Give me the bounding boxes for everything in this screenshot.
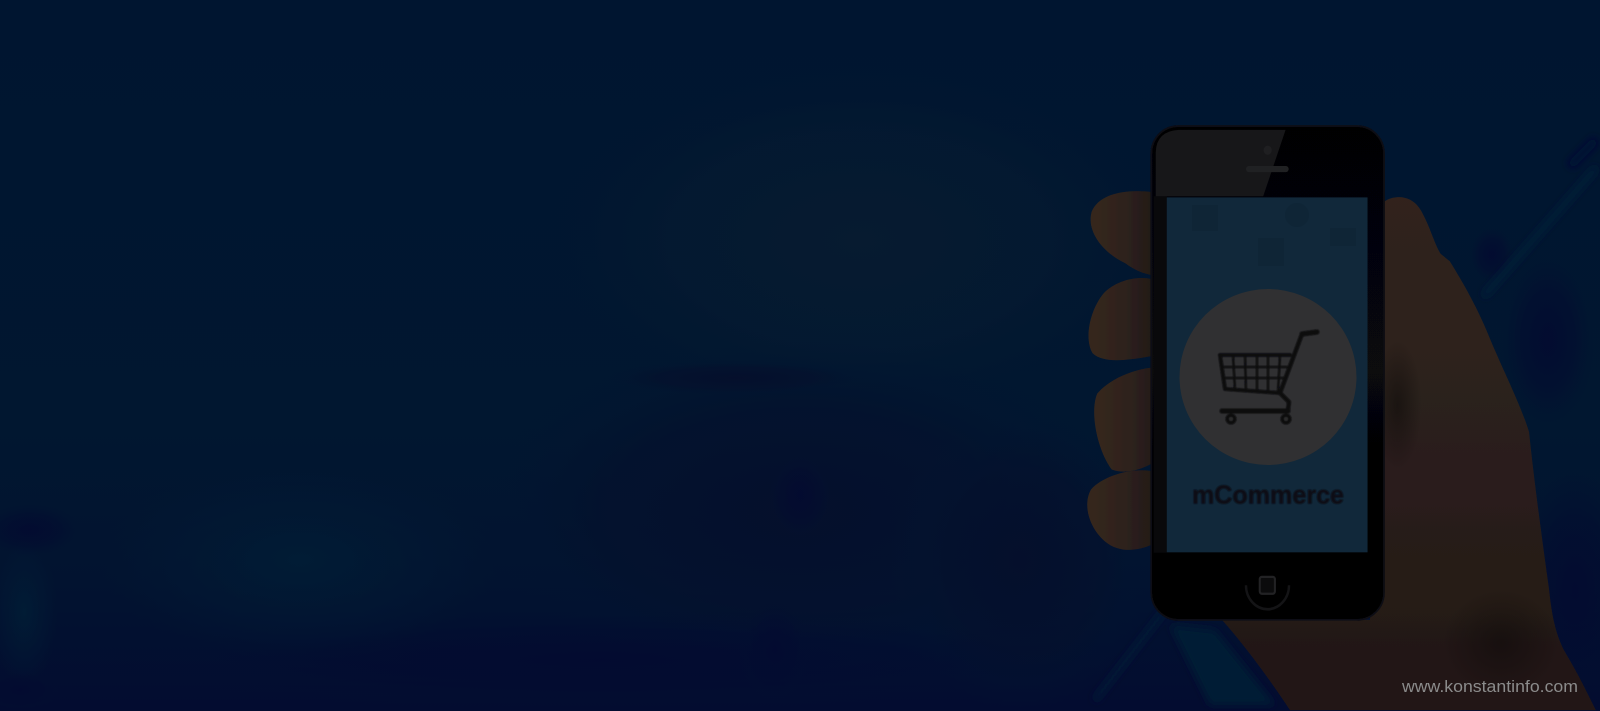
speaker xyxy=(1246,166,1289,172)
grey circle xyxy=(1180,289,1356,465)
finger 2 xyxy=(1089,278,1156,360)
finger 3 xyxy=(1094,368,1163,472)
icon: shopping cart xyxy=(1220,332,1317,423)
home button xyxy=(1246,577,1289,609)
app name: mCommerce xyxy=(1192,480,1344,510)
finger 4 xyxy=(1087,470,1158,550)
hand: inner shading xyxy=(1373,340,1559,696)
top bezel reflection xyxy=(1156,130,1286,196)
phone xyxy=(1151,126,1384,620)
hand: palm and thumb xyxy=(1222,197,1596,710)
hand holding phone xyxy=(1087,191,1596,710)
left side bezel xyxy=(1154,196,1167,553)
phone body xyxy=(1151,126,1384,620)
app icon: cart in grey circle xyxy=(1180,289,1356,510)
screen xyxy=(1167,197,1368,552)
website url: www.konstantinfo.com xyxy=(1401,678,1578,696)
screen wallpaper icons xyxy=(1192,203,1356,266)
finger 1 xyxy=(1091,191,1156,276)
camera xyxy=(1264,146,1272,155)
